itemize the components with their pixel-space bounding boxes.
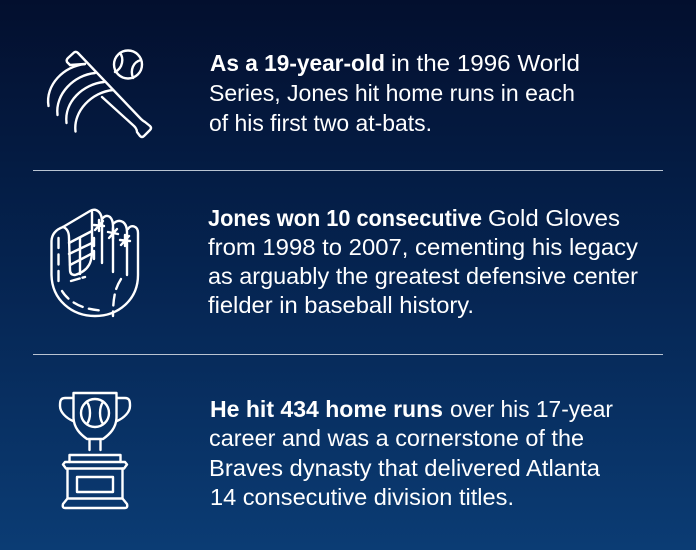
text block: Gold Gloves: fielder in baseball history. [208, 292, 474, 318]
text block: home runs: 14 consecutive division titles. [210, 484, 514, 510]
text block: home runs [209, 396, 613, 510]
text block: World Series: of his first two at-bats. [209, 110, 432, 136]
text block: World Series: in the 1996 World [391, 50, 580, 76]
text block: World Series: As a 19-year-old [210, 50, 385, 76]
text block: Gold Gloves: from 1998 to 2007, cementing his legacy [208, 234, 639, 260]
text block: Gold Gloves [208, 205, 639, 318]
text block: home runs: Braves dynasty that delivered Atlanta [209, 455, 600, 481]
icon: baseball glove [52, 210, 138, 316]
text block: Gold Gloves: Gold Gloves [488, 205, 620, 231]
text block: Gold Gloves: Jones won 10 consecutive [208, 205, 482, 231]
text block: home runs: career and was a cornerstone of the [209, 425, 584, 451]
icon: baseball bat and ball [48, 50, 151, 137]
text block: Gold Gloves: as arguably the greatest defensive center [208, 263, 638, 289]
text block: home runs: He hit 434 home runs [210, 396, 443, 422]
text block: World Series: Series, Jones hit home runs in each [209, 80, 575, 106]
icon: trophy with baseball [60, 393, 130, 508]
text block: World Series [209, 50, 580, 136]
text block: home runs: over his 17-year [450, 396, 613, 422]
